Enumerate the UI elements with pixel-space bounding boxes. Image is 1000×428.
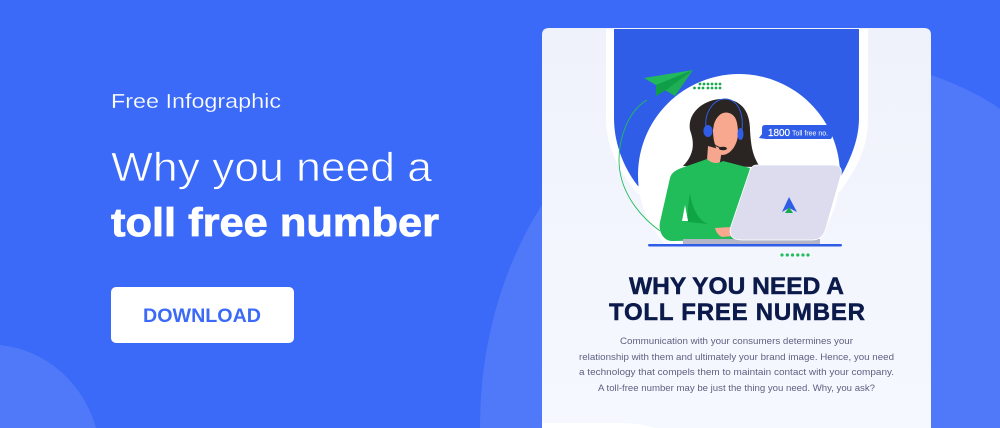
- desk line: [648, 244, 842, 246]
- white shield outline: [606, 29, 868, 210]
- illustration: support agent: [660, 99, 760, 241]
- card body text: Communication with your consumers determines your: [620, 336, 854, 347]
- arm gap: [682, 205, 688, 221]
- bubble label: Toll free no.: [792, 130, 828, 138]
- white section peek: [542, 423, 655, 428]
- headline: [111, 144, 439, 245]
- hair highlight strands: [692, 150, 693, 151]
- headline line 2: toll free number: [111, 201, 439, 245]
- card heading line 1: WHY YOU NEED A: [629, 273, 844, 300]
- download button: [111, 287, 294, 343]
- card body text: [579, 336, 894, 394]
- bubble number: 1800: [768, 128, 790, 139]
- eyebrow text: Free Infographic: [111, 91, 281, 113]
- curved flight path: [619, 100, 660, 231]
- icon: logo: [782, 197, 797, 213]
- face: [713, 112, 738, 155]
- laptop: [683, 165, 841, 244]
- card heading line 2: TOLL FREE NUMBER: [609, 299, 865, 326]
- neck: [707, 146, 722, 163]
- speech bubble: [759, 125, 834, 139]
- headset: [703, 99, 744, 150]
- hair: [683, 99, 760, 167]
- sweater shadow: [688, 193, 708, 224]
- background blob: right: [480, 75, 1000, 428]
- sweater: [660, 159, 750, 241]
- laptop lid: [730, 165, 841, 240]
- headline line 1: Why you need a: [111, 144, 432, 190]
- card heading: [609, 277, 865, 320]
- hand: [715, 227, 733, 237]
- button label: DOWNLOAD: [143, 306, 261, 327]
- panel: infographic preview card: [542, 28, 931, 428]
- decorative dots: bottom: [780, 253, 810, 257]
- blue shield: [614, 29, 859, 200]
- card body text: A toll-free number may be just the thing you need. Why, you ask?: [598, 383, 875, 394]
- background circle: bottom left: [0, 345, 96, 428]
- icon: paper plane: [644, 70, 693, 96]
- laptop base: [683, 239, 820, 244]
- card body text: relationship with them and ultimately your brand image. Hence, you need: [579, 352, 894, 363]
- decorative dots: top: [693, 83, 721, 89]
- card body text: a technology that compels them to maintain contact with your company.: [579, 367, 894, 378]
- white circle: [638, 74, 840, 244]
